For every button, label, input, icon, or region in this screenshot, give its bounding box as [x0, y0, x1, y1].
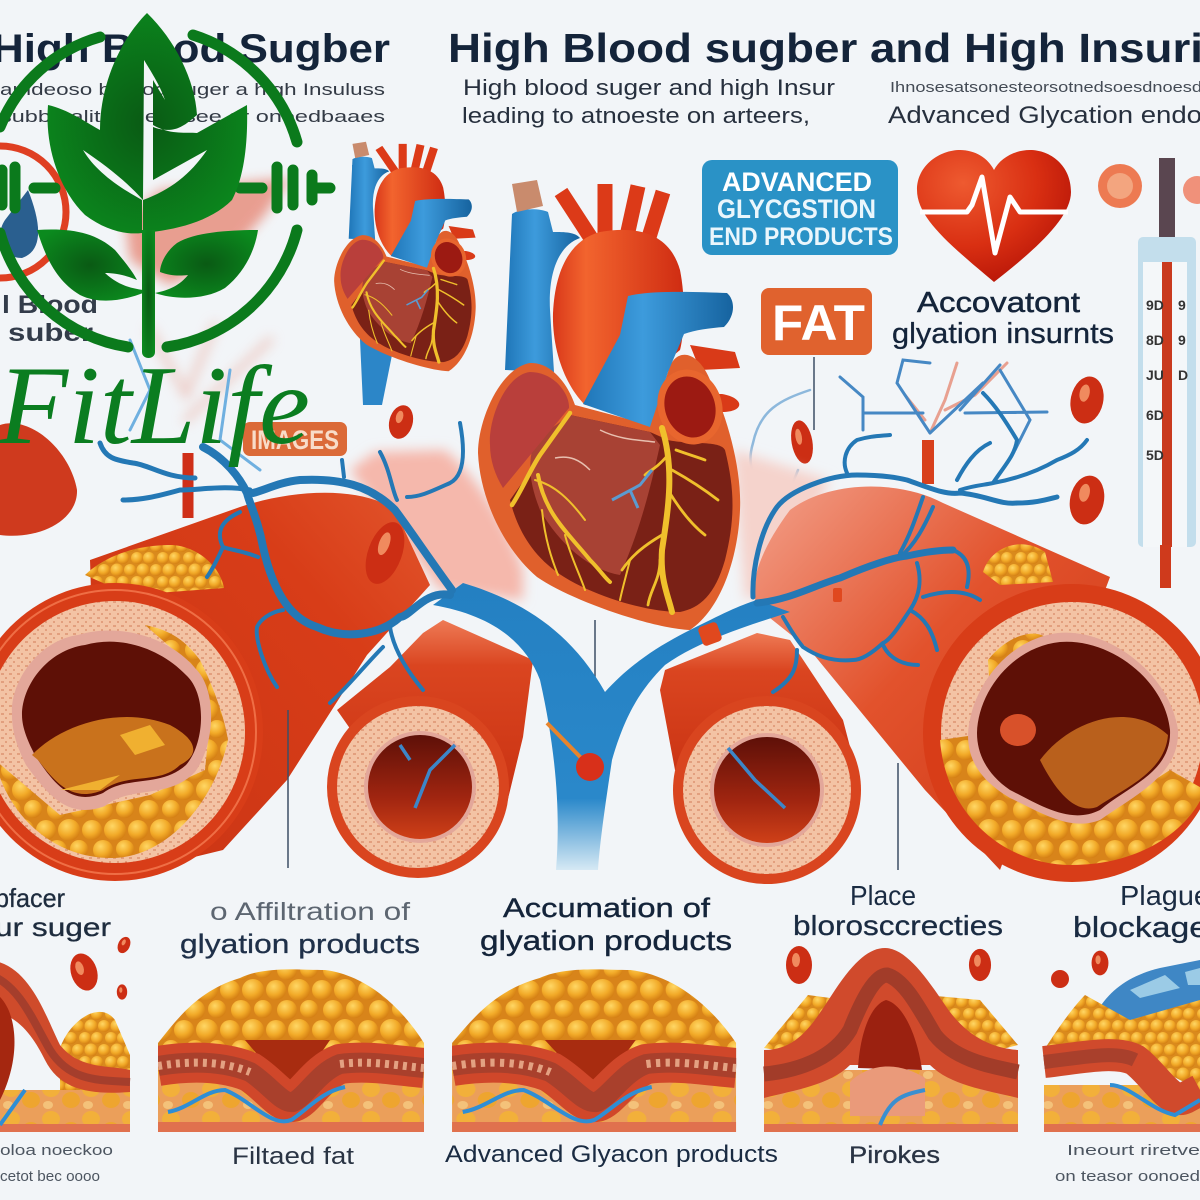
- icon: thermometer gauge: 9: [1178, 297, 1186, 313]
- panel: second bottom plaque: [158, 969, 424, 1132]
- small upper heart: [334, 142, 476, 371]
- accovatont label: glyation insurnts: [892, 318, 1114, 350]
- panel: fifth bottom plaque: [1044, 995, 1200, 1132]
- blue branching vessels: [100, 393, 1087, 870]
- left title block: ar ideoso b hood suger a high Insuluss: [0, 80, 385, 99]
- main title block: High blood suger and high Insur: [463, 75, 835, 100]
- artery: large left cross-section: [0, 493, 430, 881]
- blue label: advanced glycation end products: GLYCGSTION: [717, 194, 876, 224]
- heading: accumation of glycation products: Accumation of: [503, 893, 711, 923]
- left title block: [0, 27, 390, 126]
- caption: advanced glycation products: Advanced Glyacon products: [445, 1141, 778, 1168]
- panel: third bottom plaque: [452, 969, 736, 1132]
- caption: first panel: cetot bec oooo: [0, 1168, 100, 1185]
- artery: small right cross-section: [660, 633, 861, 884]
- drops above fourth panel: [786, 946, 991, 984]
- images label: IMAGES: [251, 425, 339, 455]
- caption: first panel: [0, 1142, 113, 1185]
- pale vessel backgrounds behind central heart: [350, 450, 830, 600]
- logo dumbbell: [2, 167, 330, 208]
- small blood drops: [385, 373, 1109, 528]
- drops above fifth panel: [1051, 951, 1108, 988]
- artery: small left cross-section: [327, 620, 533, 878]
- caption: fifth panel: [1055, 1142, 1200, 1185]
- blood sugar small label: suber: [8, 319, 93, 347]
- caption: first panel: oloa noeckoo: [0, 1142, 113, 1159]
- right subtitle block: Advanced Glycation endo: [888, 102, 1200, 129]
- left faded arterial tree: [130, 325, 270, 518]
- heading: accumation of glycation products: glyation products: [480, 925, 732, 956]
- left vessel branches: [100, 423, 463, 703]
- heading: plaque blorosccrecties: blorosccrecties: [793, 910, 1003, 941]
- left title block: subbe alith atleedsee dr oneedbaaes: [0, 107, 385, 126]
- blue label: advanced glycation end products: [702, 160, 898, 255]
- icon: heart with ECG line: [917, 150, 1071, 282]
- blood sugar small label: [2, 291, 98, 347]
- right vessel branches: [753, 393, 1087, 692]
- central heart illustration: [478, 180, 740, 630]
- icon: thermometer gauge: [1138, 158, 1196, 588]
- heading: accumation of glycation products: [480, 893, 732, 956]
- fat label: FAT: [772, 295, 865, 351]
- fat label: [761, 288, 872, 355]
- left organ: [0, 423, 77, 536]
- heading: plaque blockage: [1073, 880, 1200, 944]
- right subtitle block: Ihnosesatsonesteorsotnedsoesdnoesd: [890, 79, 1200, 96]
- caption: filtaed fat: Filtaed fat: [232, 1143, 354, 1170]
- icon: thermometer gauge: 6D: [1146, 407, 1164, 423]
- blood sugar small label: l Blood: [2, 291, 98, 319]
- heading: plaque blorosccrecties: [793, 880, 1003, 941]
- heading: first bottom column: [0, 883, 111, 942]
- main vessel trunk: [433, 583, 790, 870]
- logo wordmark: FitLife: [0, 344, 310, 468]
- panel: fourth bottom plaque arch: [764, 948, 1018, 1132]
- icon: thermometer gauge: 9: [1178, 332, 1186, 348]
- right arterial tree: [750, 360, 1047, 497]
- main title block: High Blood sugber and High Insuri: [448, 25, 1200, 71]
- logo leaves: [37, 13, 258, 358]
- main title block: leading to atnoeste on arteers,: [462, 103, 810, 128]
- main title block: [448, 25, 1200, 128]
- left title block: High Blood Sugber: [0, 27, 390, 71]
- right subtitle block: [888, 79, 1200, 129]
- caption: pirokes: Pirokes: [849, 1142, 940, 1169]
- heading: affiltration of glycation products: glyation products: [180, 929, 420, 959]
- no-sugar icon: [0, 146, 66, 278]
- caption: fifth panel: on teasor oonoed: [1055, 1168, 1200, 1185]
- blue vessel behind small heart: [352, 165, 395, 405]
- accovatont label: Accovatont: [917, 287, 1080, 319]
- caption: fifth panel: Ineourt riretve: [1067, 1142, 1200, 1159]
- icon: cell badge: [1098, 164, 1200, 208]
- accovatont label: [892, 287, 1114, 350]
- icon: blue car: [1098, 960, 1200, 1022]
- faint guide lines: [288, 357, 898, 870]
- icon: thermometer gauge: 9D: [1146, 297, 1164, 313]
- faded liver illustration: [125, 178, 290, 285]
- large artery drop: [358, 517, 412, 589]
- vessel plaque markers: [547, 588, 842, 781]
- icon: thermometer gauge: 8D: [1146, 332, 1164, 348]
- icon: thermometer gauge: 5D: [1146, 447, 1164, 463]
- heading: affiltration of glycation products: o Affiltration of: [210, 898, 410, 926]
- icon: thermometer gauge: JU: [1146, 367, 1164, 383]
- blue label: advanced glycation end products: END PRODUCTS: [709, 223, 893, 251]
- icon: thermometer gauge: D: [1178, 367, 1188, 383]
- artery: large right cross-section: [754, 487, 1200, 882]
- logo: FitLife: [0, 13, 330, 468]
- drops above first panel: [66, 935, 133, 1000]
- panel: first bottom plaque: [0, 960, 130, 1132]
- heading: plaque blorosccrecties: Place: [850, 880, 916, 911]
- heading: affiltration of glycation products: [180, 898, 420, 959]
- logo ring: [0, 35, 297, 347]
- blue label: advanced glycation end products: ADVANCED: [722, 167, 872, 197]
- heading: plaque blockage: blockage: [1073, 912, 1200, 944]
